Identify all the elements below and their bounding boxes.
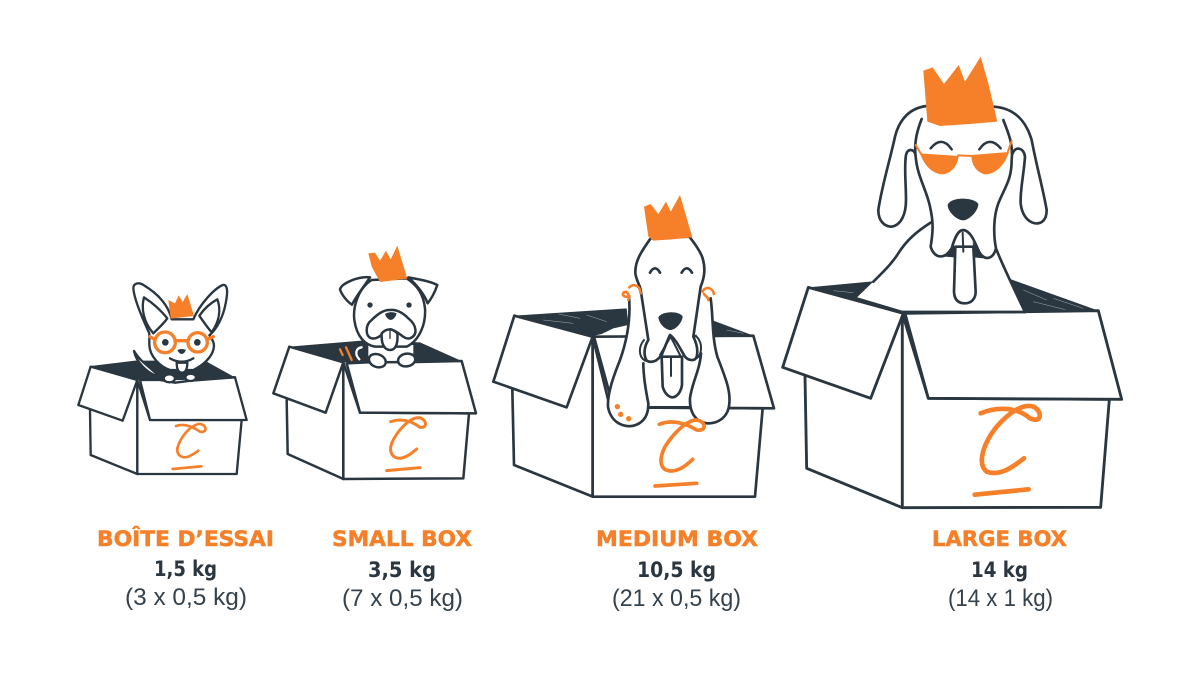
label: trial box: 1,5 kg	[154, 557, 217, 581]
crown	[644, 195, 692, 241]
panel: trial box with chihuahua	[78, 283, 247, 474]
label: small box: SMALL BOX	[332, 527, 472, 551]
paws over the flap edge	[164, 374, 196, 382]
eyes	[931, 142, 1001, 149]
logo	[387, 418, 425, 471]
hound	[608, 237, 730, 426]
line closing the box top	[856, 298, 1025, 312]
box interior	[91, 361, 235, 380]
glasses	[150, 332, 213, 353]
sunglasses	[916, 141, 1012, 174]
panel: large box	[783, 278, 1122, 508]
label: large box: (14 x 1 kg)	[948, 585, 1053, 612]
logo	[173, 424, 205, 469]
box interior	[808, 281, 877, 299]
crown	[168, 294, 194, 319]
label: medium box: 10,5 kg	[637, 558, 716, 582]
tongue	[954, 247, 976, 303]
nose	[658, 312, 683, 330]
tail	[340, 347, 362, 360]
bulldog	[340, 277, 437, 363]
crown	[368, 246, 407, 282]
label: medium box: MEDIUM BOX	[596, 527, 758, 551]
label: trial box: (3 x 0,5 kg)	[125, 584, 247, 611]
label: large box: 14 kg	[971, 558, 1028, 582]
logo	[975, 406, 1040, 495]
box flaps and body	[783, 287, 1122, 508]
label: large box: LARGE BOX	[932, 527, 1067, 551]
box flaps and body	[78, 367, 247, 474]
crown	[923, 57, 997, 126]
label: small box: (7 x 0,5 kg)	[342, 585, 463, 612]
nose	[948, 199, 978, 220]
logo	[655, 420, 704, 486]
label: medium box: (21 x 0,5 kg)	[612, 585, 741, 612]
body	[856, 223, 1025, 312]
ears	[878, 106, 1047, 227]
label: trial box	[97, 526, 274, 611]
earrings and dots	[623, 285, 714, 300]
label: medium box	[596, 527, 758, 612]
box flaps and body	[493, 316, 774, 497]
box flaps and body	[273, 347, 476, 479]
box interior	[289, 341, 462, 362]
panel: small box with bulldog	[273, 246, 476, 479]
head	[915, 119, 1012, 258]
label: large box	[932, 527, 1067, 612]
dog: large hound	[856, 57, 1047, 312]
box interior	[514, 308, 628, 336]
chihuahua	[133, 283, 227, 377]
label: small box: 3,5 kg	[368, 558, 436, 582]
label: trial box: BOÎTE D’ESSAI	[97, 526, 274, 551]
panel: medium box with hound	[493, 195, 774, 497]
dark jowl shadows	[945, 242, 954, 257]
label: small box	[332, 527, 472, 612]
